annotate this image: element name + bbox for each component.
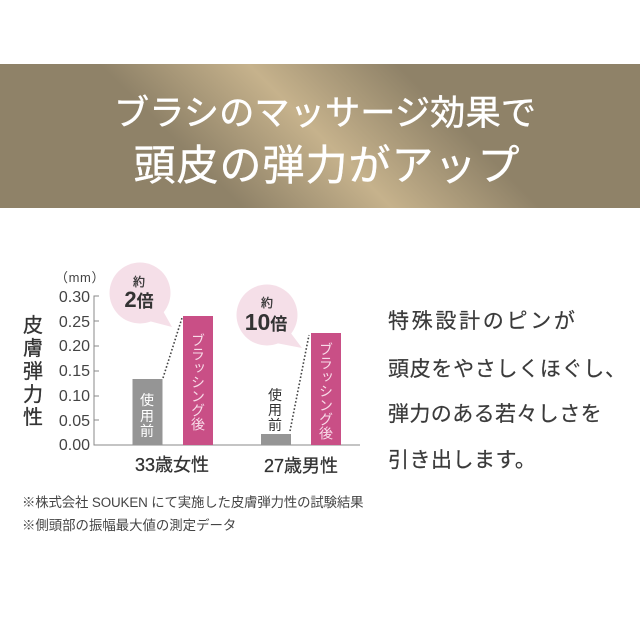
callout: about 2x: 2倍	[124, 287, 154, 312]
callout: about 10x: 10倍	[245, 309, 287, 335]
bar label: after, woman: ブラッシング後	[190, 333, 206, 431]
category label: 33 year old woman: 33歳女性	[135, 455, 209, 475]
footnote 2: ※側頭部の振幅最大値の測定データ	[22, 518, 236, 533]
body text: 弾力のある若々しさを	[388, 403, 602, 426]
vertical axis title: 性	[23, 406, 43, 429]
y-axis tick labels: 0.15	[59, 363, 90, 380]
y-axis tick labels: 0.25	[59, 314, 90, 331]
footnote 1: ※株式会社 SOUKEN にて実施した皮膚弾力性の試験結果	[22, 495, 363, 510]
group: 27 year old man	[236, 284, 341, 476]
vertical axis title: 膚	[23, 337, 43, 360]
axes	[94, 296, 360, 445]
bar label: before, woman: 用	[140, 408, 154, 424]
vertical axis title	[23, 314, 43, 429]
bar label: before, woman: 使	[140, 392, 154, 408]
callout: about 10x: 約	[261, 295, 273, 310]
y-axis tick labels: 0.05	[59, 413, 90, 430]
axis unit: （mm）	[55, 270, 105, 285]
callout: about 2x: 約	[133, 274, 145, 289]
callout: about 10x	[236, 284, 302, 348]
title line 1: ブラシのマッサージ効果で	[114, 94, 536, 133]
bar label: before, man: 前	[268, 417, 282, 433]
bar label: before, man: 用	[268, 402, 282, 418]
group: 33 year old woman	[110, 262, 213, 475]
body text: 頭皮をやさしくほぐし、	[388, 358, 627, 381]
bar: after, woman	[183, 316, 213, 445]
title band	[0, 64, 640, 208]
bar: before, woman	[132, 379, 162, 445]
y-axis tick labels: 0.20	[59, 338, 90, 355]
bar label: before, woman: 前	[140, 423, 154, 439]
callout: about 2x	[110, 262, 172, 327]
bar label: before, man	[268, 387, 282, 433]
bar label: before, woman	[140, 392, 154, 439]
y-axis tick labels: 0.30	[59, 289, 90, 306]
dotted connector	[163, 318, 182, 378]
category label: 27 year old man: 27歳男性	[264, 456, 338, 476]
body text: 引き出します。	[388, 449, 536, 472]
y-axis tick labels: 0.00	[59, 437, 90, 454]
bar: after, man	[311, 333, 341, 445]
vertical axis title: 力	[23, 383, 43, 406]
y-axis tick labels	[59, 289, 90, 454]
y-axis tick labels: 0.10	[59, 388, 90, 405]
vertical axis title: 弾	[23, 360, 43, 383]
title line 2: 頭皮の弾力がアップ	[133, 142, 520, 189]
body text	[388, 310, 627, 472]
body text: 特殊設計のピンが	[388, 310, 578, 333]
vertical axis title: 皮	[23, 314, 43, 337]
bar label: before, man: 使	[268, 387, 282, 403]
bar label: after, man: ブラッシング後	[318, 342, 334, 440]
bar: before, man	[261, 434, 291, 445]
dotted connector	[290, 335, 309, 431]
